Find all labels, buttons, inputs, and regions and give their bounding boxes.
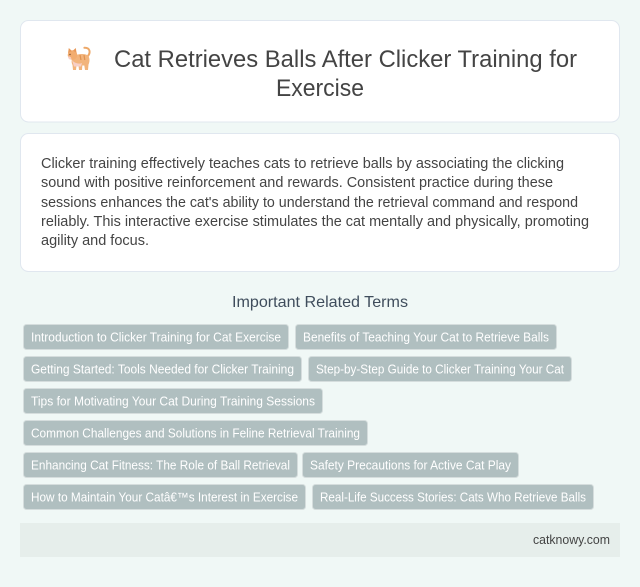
tag: challenges	[24, 420, 368, 446]
tag: safety	[302, 452, 518, 478]
tag: success stories: Real-Life Success Stories: Cats Who Retrieve Balls	[320, 490, 586, 504]
tag: step-by-step	[308, 356, 572, 382]
title: Exercise	[276, 75, 364, 102]
panel: description: Clicker training effectively teaches cats to retrieve balls by associating the clicking	[41, 156, 564, 172]
title: Cat Retrieves Balls After Clicker Training for	[114, 46, 577, 73]
tag: step-by-step: Step-by-Step Guide to Clicker Training Your Cat	[316, 362, 564, 376]
tag: getting started	[24, 356, 302, 382]
panel: title card	[20, 20, 620, 122]
tag: tips: Tips for Motivating Your Cat During Training Sessions	[31, 394, 315, 408]
tag: fitness	[24, 452, 298, 478]
tag: benefits: Benefits of Teaching Your Cat to Retrieve Balls	[303, 330, 549, 344]
title	[114, 46, 577, 102]
footer: catknowy.com	[533, 532, 610, 547]
tag: success stories	[312, 484, 594, 510]
tag: fitness: Enhancing Cat Fitness: The Role of Ball Retrieval	[31, 458, 290, 472]
tag: benefits	[296, 324, 556, 350]
tag: interest	[24, 484, 306, 510]
panel: description: agility and focus.	[41, 233, 149, 249]
tag: introduction: Introduction to Clicker Training for Cat Exercise	[31, 330, 281, 344]
panel: description: sound with positive reinforcement and rewards. Consistent practice during these	[41, 175, 553, 191]
tag: getting started: Getting Started: Tools Needed for Clicker Training	[31, 362, 294, 376]
panel: description: reliably. This interactive exercise stimulates the cat mentally and physically, promoting	[41, 214, 589, 230]
tag: challenges: Common Challenges and Solutions in Feline Retrieval Training	[31, 426, 360, 440]
footer	[20, 523, 620, 557]
panel: description: sessions enhances the cat's ability to understand the retrieval command and respond	[41, 195, 578, 211]
panel: description	[20, 134, 620, 272]
tag: safety: Safety Precautions for Active Cat Play	[310, 458, 512, 472]
heading: related terms: Important Related Terms	[232, 294, 408, 311]
tag: introduction	[24, 324, 288, 350]
icon: cat	[68, 48, 90, 70]
tag: interest: How to Maintain Your Catâ€™s Interest in Exercise	[31, 490, 298, 504]
tag: tips	[24, 388, 322, 414]
